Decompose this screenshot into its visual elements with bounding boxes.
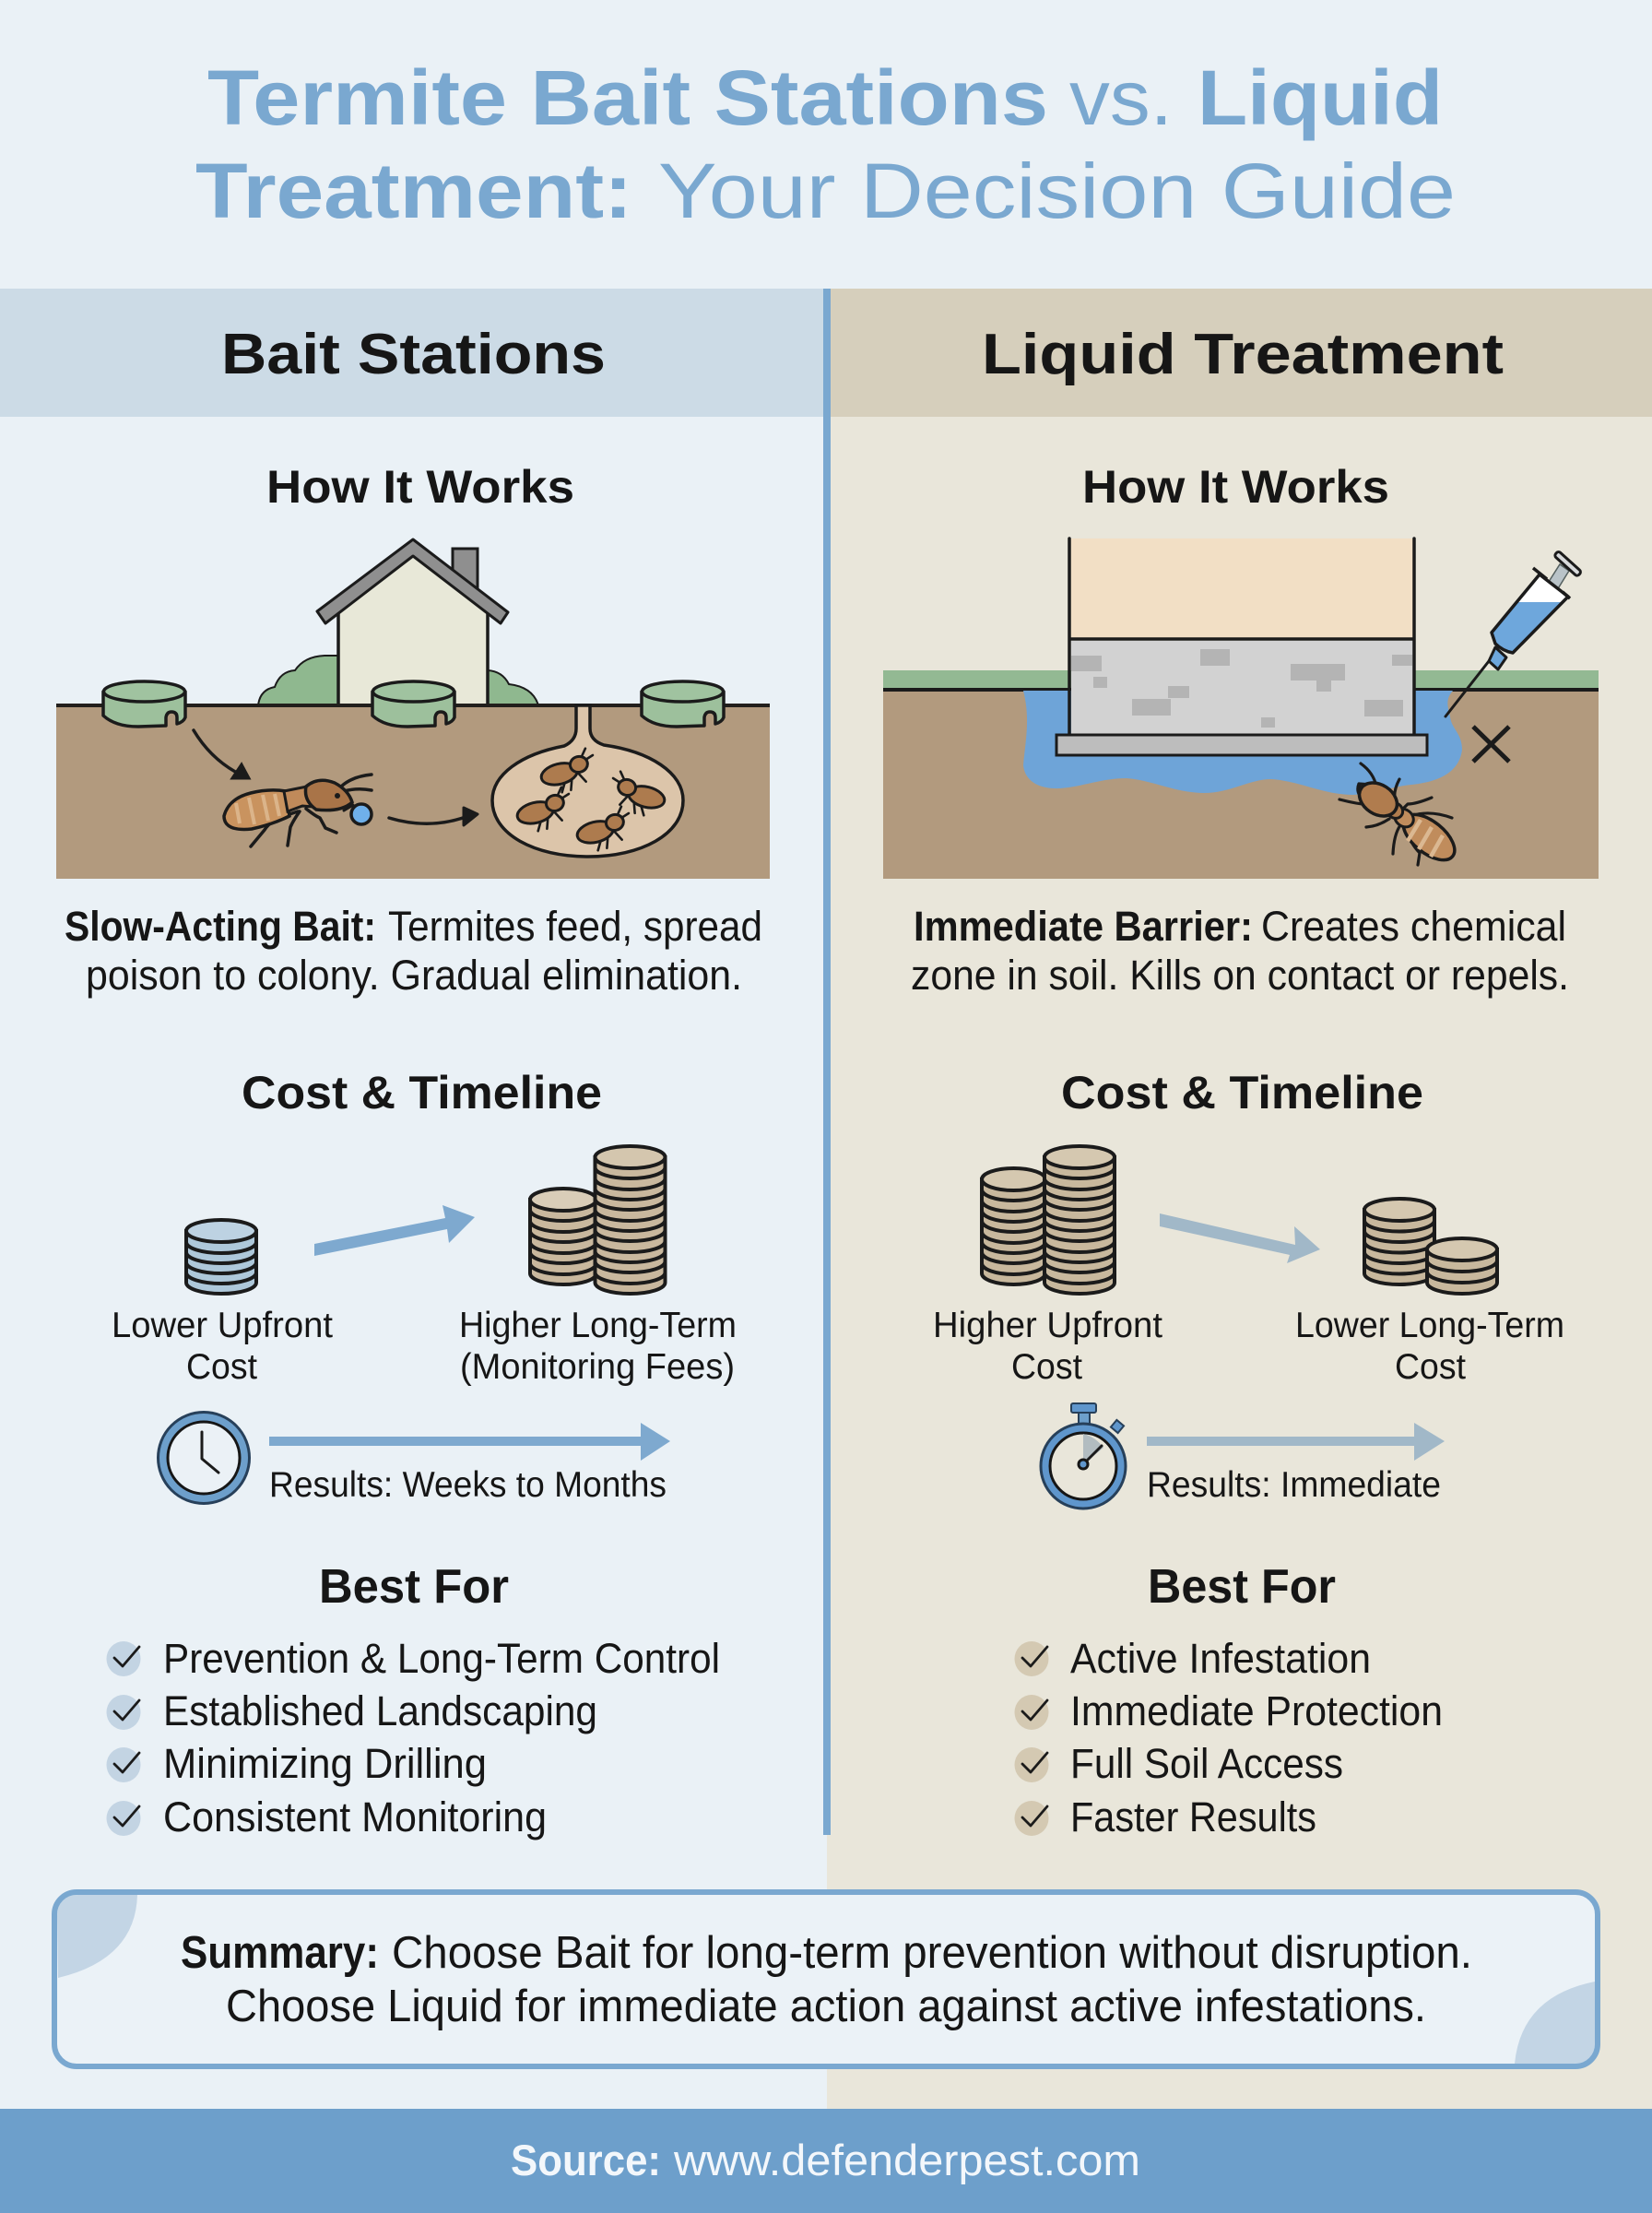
colony chamber [492, 705, 683, 857]
list: liquid best for: Faster Results [1070, 1793, 1316, 1840]
heading: cost and timeline (liquid): Cost & Timeline [1061, 1067, 1423, 1118]
panel: bait stations column [56, 461, 770, 1840]
arrow: cost falls [1160, 1213, 1320, 1263]
text: immediate barrier: Creates chemical [1261, 903, 1566, 950]
arrow: cost rises [314, 1205, 475, 1256]
icon: high coin stacks [982, 1146, 1115, 1294]
list: liquid best for [1014, 1635, 1443, 1840]
label: higher upfront cost: Cost [1011, 1347, 1082, 1387]
liquid barrier zone [1023, 691, 1462, 795]
column divider [823, 289, 831, 1835]
title [195, 54, 1456, 234]
label: lower long-term cost [1295, 1306, 1564, 1387]
icon: syringe [1446, 550, 1582, 716]
text: slow-acting bait: Termites feed, spread [388, 903, 762, 950]
footer: source [0, 2109, 1652, 2213]
callout: summary box: Choose Liquid for immediate action against active infestations. [226, 1982, 1426, 2031]
heading: how it works (liquid): How It Works [1082, 461, 1389, 513]
callout: summary box: Summary: [181, 1928, 379, 1978]
header: Liquid Treatment: Liquid Treatment [982, 323, 1504, 386]
house [317, 539, 508, 706]
soil [883, 690, 1599, 879]
icon: clock [159, 1413, 249, 1503]
list: bait best for: Consistent Monitoring [163, 1793, 547, 1840]
text: slow-acting bait: Slow-Acting Bait: [65, 903, 376, 950]
illustration: bait station soil scene [56, 539, 770, 879]
colony termites [513, 747, 668, 855]
icon: large coin stacks [530, 1146, 666, 1294]
text: slow-acting bait [65, 903, 762, 999]
icon: X mark [1473, 727, 1509, 762]
concrete foundation speckles [1071, 649, 1412, 728]
arrow: timeline weeks to months [269, 1423, 670, 1461]
label: lower upfront cost: Cost [186, 1347, 257, 1387]
heading: best for (liquid): Best For [1148, 1560, 1336, 1614]
label: lower upfront cost: Lower Upfront [112, 1306, 333, 1345]
label: results weeks to months: Results: Weeks to Months [269, 1465, 667, 1505]
heading: best for (bait): Best For [319, 1560, 509, 1614]
label: higher long-term: (Monitoring Fees) [460, 1347, 735, 1387]
bait station 2 [372, 681, 454, 727]
arrow: termite to colony [389, 808, 478, 825]
title: Your Decision Guide [658, 148, 1456, 234]
bait station 1 [103, 681, 185, 727]
list: bait best for: Prevention & Long-Term Control [163, 1635, 720, 1682]
title: Termite Bait Stations [207, 54, 1048, 141]
termite repelled at barrier [1339, 763, 1462, 869]
label: higher long-term [459, 1306, 737, 1387]
icon: stopwatch [1041, 1403, 1126, 1509]
bait station 3 [642, 681, 724, 727]
header: Liquid Treatment [831, 289, 1652, 417]
footer: source: Source: [511, 2136, 661, 2184]
soil [56, 705, 770, 879]
arrow: timeline immediate [1147, 1423, 1445, 1461]
right column background [827, 417, 1652, 2109]
termite carrying bait [224, 775, 372, 846]
label: results immediate: Results: Immediate [1147, 1465, 1441, 1505]
icon: low coin stacks [1364, 1199, 1497, 1294]
list: bait best for: Minimizing Drilling [163, 1740, 487, 1787]
list: liquid best for: Immediate Protection [1070, 1687, 1443, 1734]
arrow: station to termite [194, 730, 249, 778]
text: slow-acting bait: poison to colony. Gradual elimination. [86, 952, 742, 999]
label: higher long-term: Higher Long-Term [459, 1306, 737, 1345]
label: lower upfront cost [112, 1306, 333, 1387]
title: Liquid [1198, 54, 1443, 141]
icon: small coin stack [186, 1220, 256, 1294]
list: liquid best for: Active Infestation [1070, 1635, 1371, 1682]
title: Treatment: [195, 148, 632, 234]
header: Bait Stations [0, 289, 823, 417]
title: vs. [1069, 54, 1173, 141]
header: Bait Stations: Bait Stations [221, 323, 606, 386]
label: higher upfront cost [933, 1306, 1162, 1387]
footer: source: www.defenderpest.com [673, 2136, 1140, 2184]
label: lower long-term cost: Cost [1395, 1347, 1466, 1387]
list: bait best for [107, 1635, 720, 1840]
list: bait best for: Established Landscaping [163, 1687, 597, 1734]
text: immediate barrier: zone in soil. Kills on contact or repels. [911, 952, 1569, 999]
illustration: liquid barrier scene [883, 538, 1599, 879]
footing [1056, 735, 1427, 755]
ground line [883, 688, 1599, 692]
callout: summary box [54, 1892, 1598, 2066]
wall [1069, 538, 1414, 734]
callout: summary box: Choose Bait for long-term prevention without disruption. [392, 1928, 1472, 1978]
ground line [56, 704, 770, 707]
label: lower long-term cost: Lower Long-Term [1295, 1306, 1564, 1345]
panel: liquid treatment column [883, 461, 1599, 1840]
grass band [883, 670, 1599, 690]
text: immediate barrier [911, 903, 1569, 999]
list: liquid best for: Full Soil Access [1070, 1740, 1343, 1787]
heading: how it works (bait): How It Works [266, 461, 574, 513]
label: higher upfront cost: Higher Upfront [933, 1306, 1162, 1345]
heading: cost and timeline (bait): Cost & Timeline [242, 1067, 602, 1118]
bushes [258, 656, 538, 705]
text: immediate barrier: Immediate Barrier: [914, 903, 1253, 950]
